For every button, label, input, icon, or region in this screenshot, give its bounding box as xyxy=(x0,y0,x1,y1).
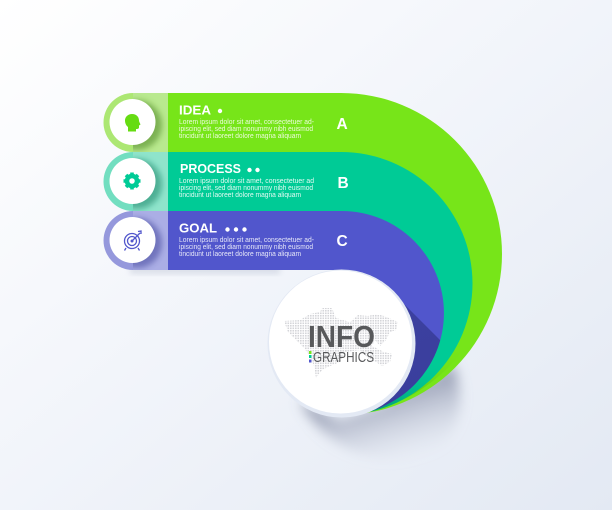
label: B: B xyxy=(338,175,349,192)
long shadow of the central disc xyxy=(300,365,460,460)
text block: GOAL: GOAL xyxy=(179,220,217,236)
panel: IDEA green band xyxy=(168,93,502,415)
panel: central disc xyxy=(268,270,416,418)
label: A: A xyxy=(336,116,348,133)
text block: IDEA: ipiscing elit, sed diam nonummy nibh euismod xyxy=(179,126,313,133)
soft shadow under left rows xyxy=(130,266,280,274)
panel: GOAL icon badge xyxy=(104,211,168,270)
text block: GOAL: Lorem ipsum dolor sit amet, consectetuer ad- xyxy=(179,237,315,244)
logo dots xyxy=(309,351,312,362)
text block: PROCESS: PROCESS xyxy=(180,161,241,176)
panel: IDEA icon badge xyxy=(103,93,168,152)
icon: target xyxy=(124,231,141,250)
text block: GOAL: ipiscing elit, sed diam nonummy nibh euismod xyxy=(179,244,313,251)
label: C: C xyxy=(336,233,348,250)
text block: GOAL xyxy=(179,220,315,258)
text block: PROCESS xyxy=(179,161,314,199)
text block: IDEA: tincidunt ut laoreet dolore magna aliquam xyxy=(179,133,301,140)
text block: PROCESS: ipiscing elit, sed diam nonummy nibh euismod xyxy=(179,185,313,192)
shadow of disc on purple band xyxy=(374,304,440,410)
icon: head with brain xyxy=(125,114,140,132)
world map dotted xyxy=(284,308,398,378)
logo text: GRAPHICS: GRAPHICS xyxy=(313,349,374,366)
text block: PROCESS: tincidunt ut laoreet dolore magna aliquam xyxy=(179,192,301,199)
text block: IDEA xyxy=(179,102,315,140)
text block: GOAL: tincidunt ut laoreet dolore magna aliquam xyxy=(179,251,301,258)
icon: gear xyxy=(124,172,140,190)
text block: IDEA: Lorem ipsum dolor sit amet, consectetuer ad- xyxy=(179,119,315,126)
logo text: INFO: INFO xyxy=(308,320,375,354)
panel: teal band lower shading xyxy=(341,357,450,415)
text block: IDEA: IDEA xyxy=(179,102,212,118)
panel: PROCESS teal band xyxy=(168,152,472,415)
panel: green band lower shading xyxy=(341,340,470,415)
panel: GOAL purple band xyxy=(168,211,444,415)
text block: PROCESS: Lorem ipsum dolor sit amet, consectetuer ad xyxy=(179,178,314,185)
panel: PROCESS icon badge xyxy=(103,152,168,211)
